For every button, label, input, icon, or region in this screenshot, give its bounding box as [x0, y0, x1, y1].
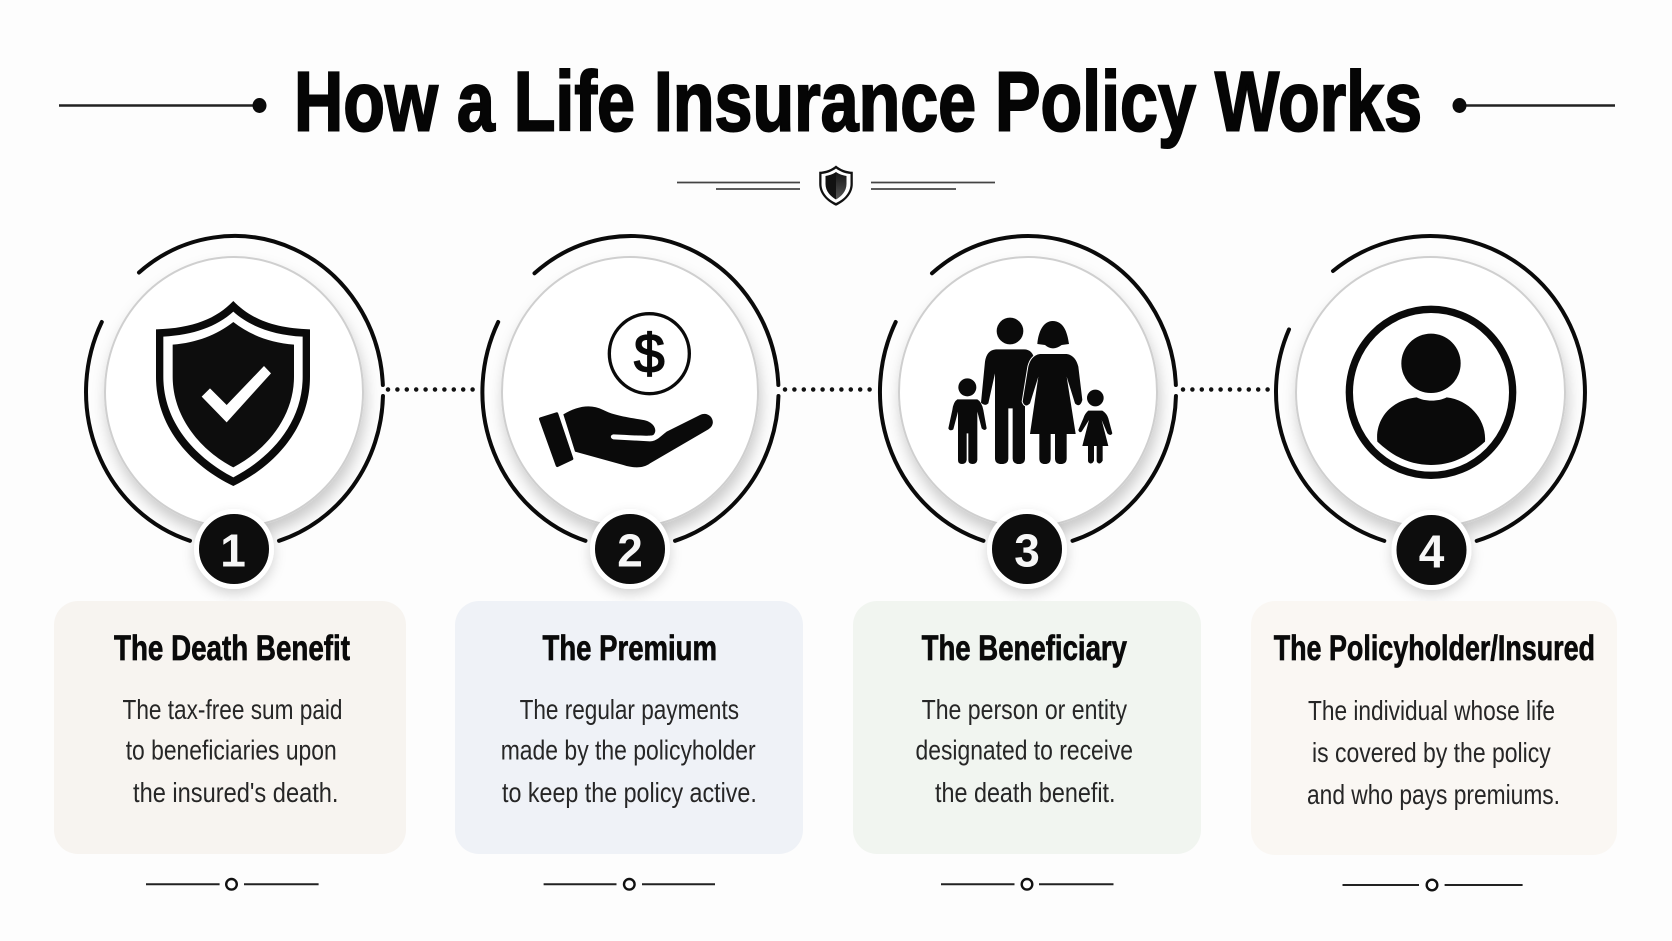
step 3 medallion	[880, 236, 1176, 586]
panel: the death benefit	[54, 601, 406, 854]
description: The person or entity	[922, 694, 1127, 725]
subtitle ornament lines: right	[871, 182, 995, 189]
subtitle ornament lines: left	[677, 182, 800, 189]
panel: the beneficiary	[853, 601, 1201, 854]
description: The regular payments	[520, 694, 739, 725]
number badge 3: 3	[1014, 524, 1040, 576]
outer ring arcs	[482, 236, 778, 541]
icon: person in circle	[1349, 309, 1513, 475]
footer ornament 1	[146, 879, 319, 890]
icon: hand holding dollar coin	[541, 314, 713, 467]
description: to keep the policy active.	[502, 777, 757, 808]
number badge 4: 4	[1419, 526, 1445, 578]
description	[122, 694, 342, 808]
description: is covered by the policy	[1312, 737, 1551, 768]
connector: step 1 to 2	[388, 387, 474, 392]
number badge 1	[196, 512, 272, 586]
description: and who pays premiums.	[1307, 779, 1560, 810]
description	[1307, 695, 1560, 810]
outer ring arcs	[1276, 236, 1585, 541]
description: The tax-free sum paid	[122, 694, 342, 725]
step 2 medallion	[482, 236, 778, 586]
icon: family	[948, 318, 1112, 464]
outer ring arcs	[86, 236, 383, 541]
heading: The Death Benefit	[114, 629, 350, 668]
number badge 1: 1	[220, 524, 246, 576]
heading: The Premium	[542, 629, 717, 668]
description: the insured's death.	[133, 777, 338, 808]
description: designated to receive	[916, 734, 1133, 766]
number badge 4	[1394, 512, 1469, 588]
description: made by the policyholder	[501, 734, 756, 766]
panel: the premium	[455, 601, 803, 854]
description	[916, 694, 1133, 808]
icon: shield with check	[156, 301, 310, 486]
number badge 3	[990, 512, 1064, 586]
title: How a Life Insurance Policy Works	[294, 54, 1422, 148]
connector: step 3 to 4	[1183, 387, 1268, 392]
description: the death benefit.	[935, 777, 1116, 808]
description: to beneficiaries upon	[126, 734, 337, 766]
number badge 2	[592, 512, 668, 586]
inner disc	[502, 257, 758, 527]
panel: the policyholder/insured	[1251, 601, 1617, 855]
icon: hand holding dollar coin: $	[634, 323, 665, 385]
footer ornament 2	[544, 879, 715, 890]
connector: step 2 to 3	[785, 387, 871, 392]
description: The individual whose life	[1308, 695, 1555, 726]
title rule: left	[59, 98, 266, 113]
heading: The Beneficiary	[922, 629, 1127, 668]
outer ring arcs	[880, 236, 1176, 541]
footer ornament 4	[1342, 880, 1523, 890]
description	[501, 694, 757, 808]
inner disc	[1296, 257, 1565, 527]
inner disc	[105, 257, 363, 527]
icon: small shield	[819, 166, 853, 206]
inner disc	[899, 257, 1157, 527]
title rule: right	[1452, 98, 1615, 113]
footer ornament 3	[941, 879, 1114, 890]
step 1 medallion	[86, 236, 383, 587]
number badge 2: 2	[617, 524, 643, 576]
step 4 medallion	[1276, 236, 1585, 588]
